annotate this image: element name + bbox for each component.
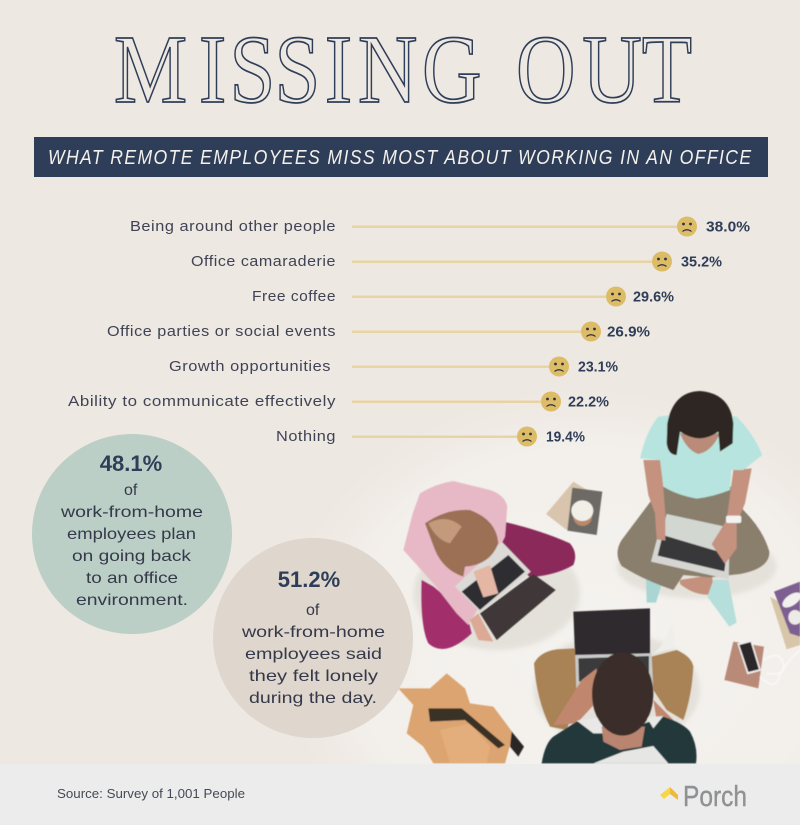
row: being around other people: 38.0% (706, 220, 750, 236)
green stat circle: environment. (76, 592, 188, 609)
stack of books and headphones (770, 582, 800, 649)
subtitle banner (34, 137, 768, 177)
tan stat circle: work-from-home (241, 624, 385, 641)
row: ability to communicate: 22.2% (568, 394, 609, 410)
row: nothing: Nothing (276, 428, 336, 445)
green stat circle: of (124, 482, 138, 499)
row: free coffee: Free coffee (252, 288, 336, 305)
green stat circle: on going back (72, 548, 192, 565)
subtitle banner: WHAT REMOTE EMPLOYEES MISS MOST ABOUT WORKING IN AN OFFICE (48, 146, 751, 168)
tan stat circle: 51.2% (278, 567, 340, 592)
tan stat circle: employees said (245, 646, 382, 663)
row: growth opportunities: 23.1% (578, 360, 618, 376)
row: office parties (107, 322, 650, 342)
source note: Source: Survey of 1,001 People (57, 787, 245, 801)
row: ability to communicate: Ability to communicate effectively (68, 393, 336, 410)
row: office parties: Office parties or social events (107, 323, 336, 340)
notebook and phone (724, 640, 800, 688)
row: ability to communicate (68, 392, 609, 412)
Porch logo: Porch (683, 781, 747, 813)
footer (0, 764, 800, 825)
woman in pink hoodie (403, 481, 575, 649)
green stat circle: 48.1% (100, 451, 162, 476)
row: office camaraderie: Office camaraderie (191, 253, 336, 270)
row: being around other people: Being around other people (130, 218, 336, 235)
tan stat circle: of (306, 602, 320, 619)
green stat circle: employees plan (67, 526, 196, 543)
row: office parties: 26.9% (607, 324, 650, 340)
man with laptop (534, 608, 697, 763)
woman in teal shirt (617, 391, 769, 627)
green stat circle (32, 434, 232, 634)
tan stat circle: they felt lonely (249, 668, 378, 685)
row: growth opportunities: Growth opportunities (169, 358, 331, 375)
tan stat circle: during the day. (249, 690, 377, 707)
row: free coffee: 29.6% (633, 290, 674, 306)
backpack (398, 673, 524, 763)
floor shadows (413, 535, 777, 747)
row: office camaraderie: 35.2% (681, 254, 722, 270)
row: nothing (276, 426, 585, 446)
row: free coffee (252, 286, 674, 306)
green stat circle: to an office (86, 570, 178, 587)
tan stat circle (213, 538, 413, 738)
row: nothing: 19.4% (546, 430, 585, 446)
title: MISSING OUT (114, 17, 692, 124)
row: growth opportunities (169, 356, 618, 376)
green stat circle: work-from-home (60, 504, 203, 521)
photo: students with laptops (398, 391, 800, 763)
book and coffee cup (546, 482, 602, 535)
Porch logo (660, 781, 747, 813)
row: office camaraderie (191, 252, 722, 272)
row: being around other people (130, 216, 750, 236)
lollipop chart (68, 216, 750, 446)
